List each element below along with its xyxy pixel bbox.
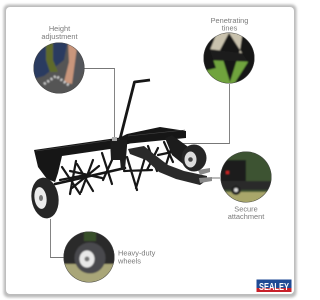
label: secure attachment: attachment — [228, 212, 264, 221]
label: height adjustment: Height — [49, 24, 70, 33]
tow arm — [128, 146, 207, 185]
label: penetrating tines: tines — [222, 24, 238, 32]
label: height adjustment: adjustment — [41, 32, 78, 41]
aerator machine — [29, 80, 212, 220]
central bracket — [110, 140, 127, 170]
handle — [119, 80, 150, 143]
circle photo: secure attachment — [220, 152, 272, 202]
label: heavy-duty wheels: wheels — [117, 256, 141, 265]
right wheel — [182, 144, 206, 172]
label: heavy-duty wheels: Heavy-duty — [118, 248, 156, 258]
wheel support arm — [165, 135, 195, 168]
circle photo: penetrating tines — [204, 32, 254, 84]
label: penetrating tines: Penetrating — [211, 16, 248, 25]
logo: Sealey — [256, 280, 292, 293]
label: secure attachment: Secure — [234, 204, 258, 214]
hitch — [198, 168, 212, 183]
tine rotors and axle — [55, 142, 182, 194]
circle photo: heavy-duty wheels — [64, 232, 114, 282]
left wheel — [29, 176, 61, 220]
frame bar and left end plate — [34, 127, 186, 182]
circle photo: height adjustment — [34, 42, 84, 94]
logo: Sealey: SEALEY — [259, 281, 289, 293]
leader lines — [50, 68, 230, 258]
